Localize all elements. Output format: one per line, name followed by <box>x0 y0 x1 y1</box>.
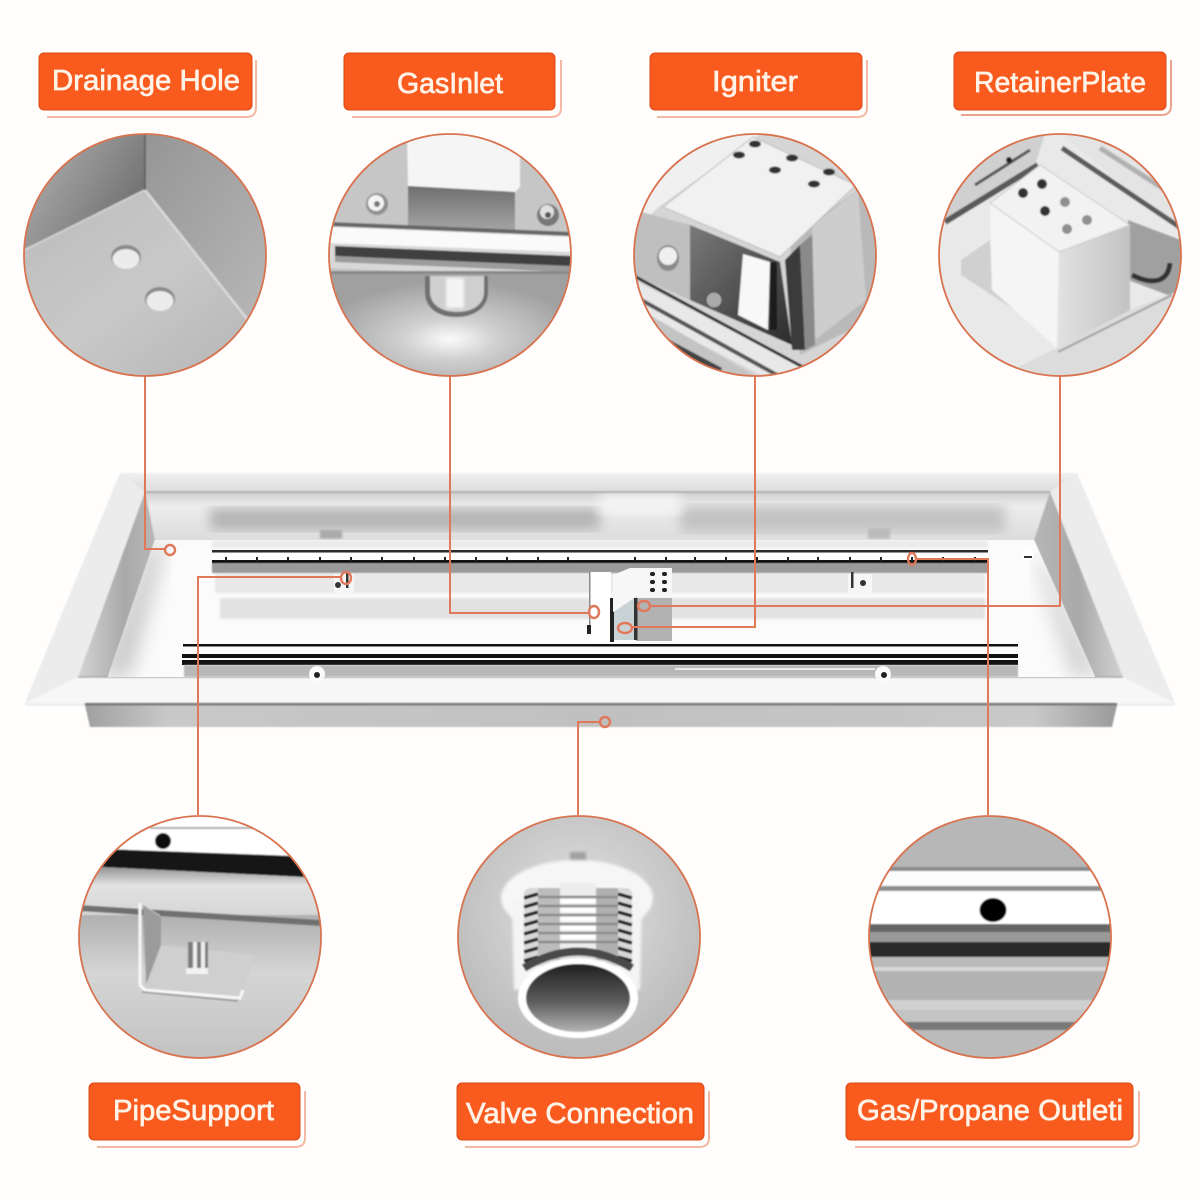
burner pan illustration <box>25 473 1175 727</box>
floor panels <box>212 540 988 619</box>
screws <box>657 245 722 308</box>
retainer box <box>990 165 1130 348</box>
detail circle: gas inlet <box>329 134 571 379</box>
mounting screws <box>366 193 559 226</box>
burner pipe <box>636 274 804 375</box>
ignition plate <box>663 137 856 257</box>
drainage holes <box>111 245 175 311</box>
detail circle: gas outlet <box>869 816 1111 1060</box>
detail circle: pipe support <box>79 816 321 1060</box>
threaded fitting <box>524 883 632 966</box>
leader line: drainage hole <box>145 376 175 555</box>
label: RetainerPlate <box>954 52 1171 115</box>
label: Igniter <box>650 53 867 117</box>
label: Drainage Hole <box>39 53 256 117</box>
leader line: retainer plate <box>638 376 1060 611</box>
igniter element <box>738 254 770 330</box>
gas port hole <box>980 898 1006 922</box>
rear burner pipe <box>212 550 988 573</box>
leader line: gas inlet <box>450 376 599 618</box>
label: Valve Connection <box>457 1083 709 1147</box>
burner pipe <box>329 222 571 278</box>
front burner pipe <box>182 644 1018 677</box>
leader line: pipe support <box>198 572 351 815</box>
pan back wall <box>145 492 1050 540</box>
retainer holes <box>1018 179 1092 234</box>
gas inlet nozzle <box>425 276 488 317</box>
label: RetainerPlate: RetainerPlate <box>974 67 1146 99</box>
detail circle: drainage hole <box>22 134 268 378</box>
detail circle: retainer plate <box>939 134 1181 376</box>
label: PipeSupport: PipeSupport <box>113 1095 274 1127</box>
label: Igniter: Igniter <box>712 66 798 98</box>
pipe opening <box>518 958 638 1038</box>
pipe hole <box>155 833 171 849</box>
pan floor <box>100 540 1100 677</box>
label: Gas/Propane Outleti: Gas/Propane Outleti <box>857 1095 1123 1127</box>
label: GasInlet <box>344 53 561 117</box>
support bracket <box>140 903 255 1001</box>
pipe supports <box>309 548 1034 682</box>
pan side walls <box>78 492 1123 677</box>
detail circle: valve connection <box>458 816 700 1058</box>
pan flange <box>25 473 1175 706</box>
detail circle: igniter <box>634 134 880 390</box>
igniter assembly <box>587 568 672 642</box>
leader line: gas outlet <box>908 553 988 815</box>
pan lower lip <box>85 703 1117 727</box>
label: Drainage Hole: Drainage Hole <box>52 65 240 97</box>
plate holes <box>733 140 835 188</box>
leader line: valve connection <box>578 717 610 815</box>
label: PipeSupport <box>89 1083 305 1147</box>
label: Gas/Propane Outleti <box>846 1083 1139 1147</box>
label: Valve Connection: Valve Connection <box>466 1098 694 1130</box>
leader line: igniter <box>618 376 755 633</box>
label: GasInlet: GasInlet <box>397 68 503 100</box>
